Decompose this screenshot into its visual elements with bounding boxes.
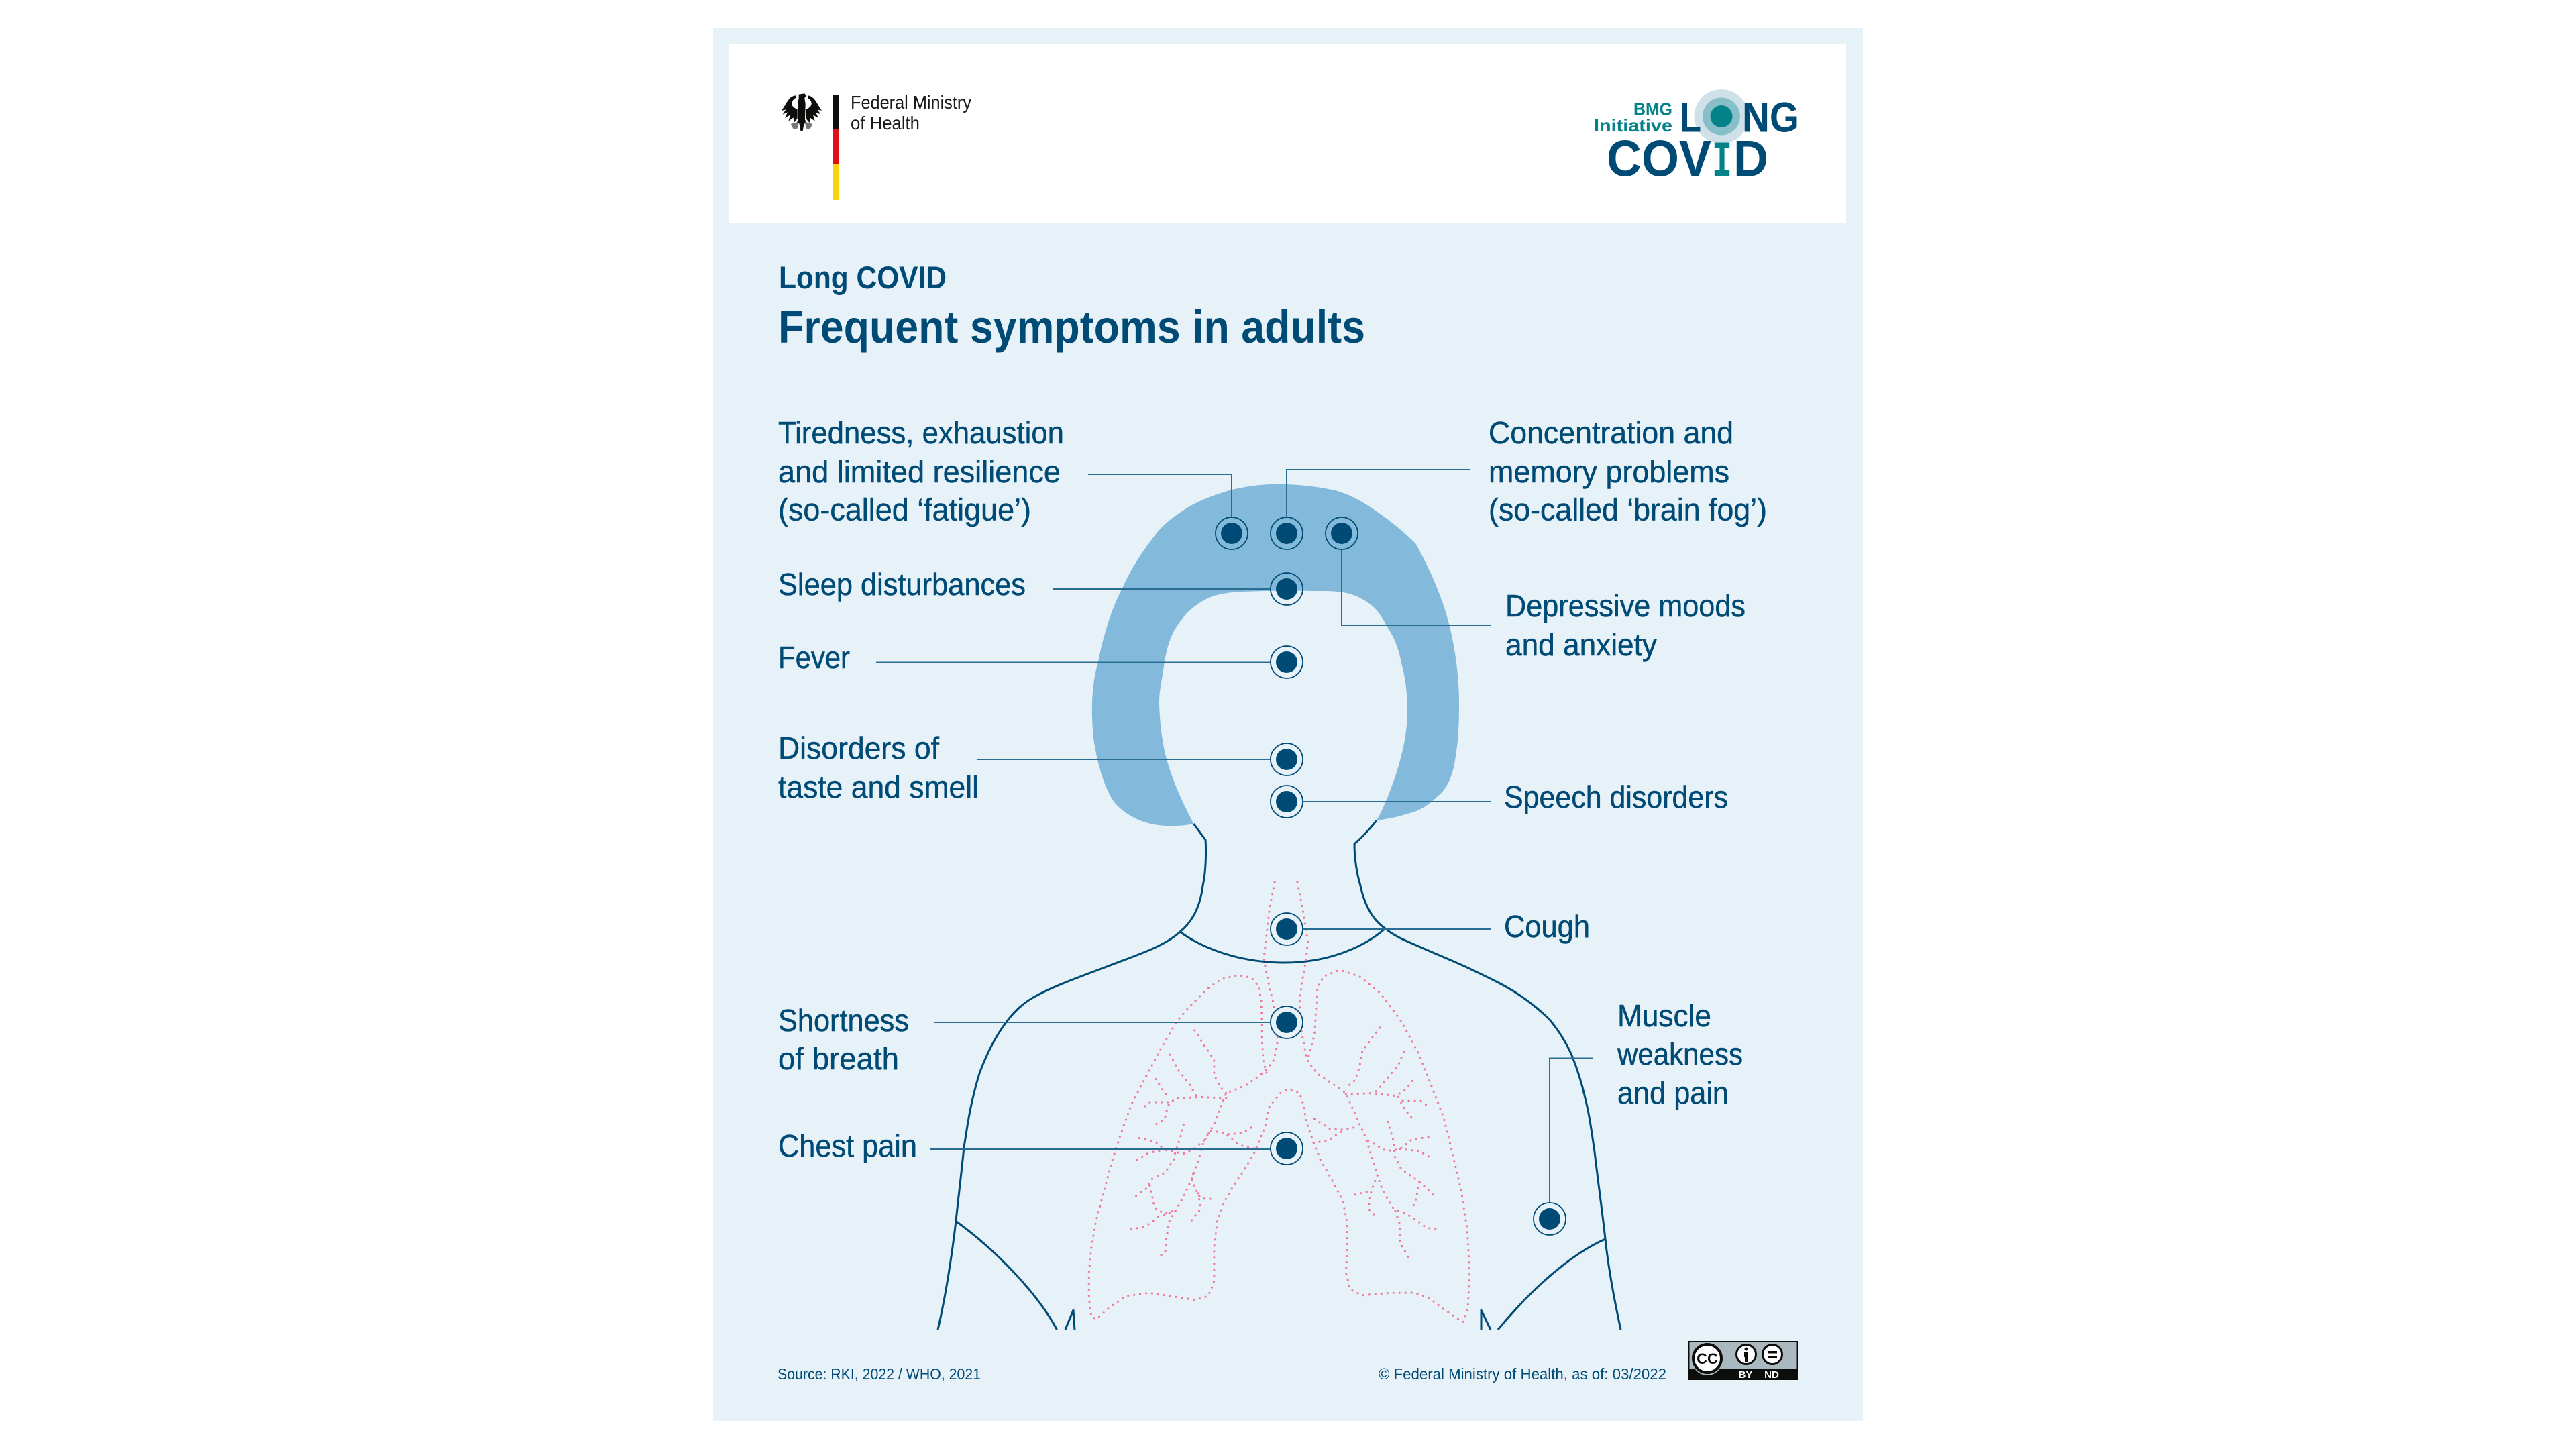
ministry name: of Health [851,113,920,133]
symptom: speech disorders [1271,780,1728,818]
symptom: cough: Cough [1504,909,1590,944]
logo: BMG Initiative Long COVID: I [1712,134,1732,192]
icon: federal eagle [782,93,822,131]
icon: CC BY-ND licence badge: BY [1739,1369,1752,1381]
symptom: fatigue: (so-called ‘fatigue’) [778,492,1031,527]
symptom: fever: Fever [778,640,850,675]
logo: BMG Initiative Long COVID: Initiative [1594,115,1672,136]
copyright note: © Federal Ministry of Health, as of: 03/2022 [1379,1365,1666,1383]
hair shape [1092,484,1459,826]
symptom: brain fog [1271,415,1767,549]
panel: header [729,44,1846,223]
symptom: taste and smell: Disorders of [778,731,939,765]
symptom: shortness of breath: of breath [778,1041,899,1076]
symptom: fatigue: and limited resilience [778,454,1061,489]
symptom: muscle weakness: and pain [1617,1075,1729,1110]
symptom: depressive moods: and anxiety [1505,627,1657,662]
lungs and trachea, dotted [1089,882,1470,1322]
symptom: brain fog: memory problems [1489,454,1729,489]
logo: Federal Ministry of Health [782,92,971,200]
ministry name: Federal Ministry [851,92,971,113]
symptom: speech disorders: Speech disorders [1504,780,1728,814]
logo: BMG Initiative Long COVID [1594,89,1799,192]
symptom: shortness of breath: Shortness [778,1003,909,1038]
symptom: muscle weakness: weakness [1617,1036,1743,1071]
logo: BMG Initiative Long COVID: COV [1607,131,1711,188]
source note: Source: RKI, 2022 / WHO, 2021 [777,1365,981,1383]
logo: BMG Initiative Long COVID: D [1733,131,1768,188]
icon: CC BY-ND licence badge [1688,1341,1798,1381]
symptom: brain fog: (so-called ‘brain fog’) [1489,492,1767,527]
symptom: depressive moods: Depressive moods [1505,588,1746,623]
icon: CC BY-ND licence badge: ND [1764,1369,1779,1381]
title [778,260,1365,353]
symptom: chest pain [778,1128,1303,1165]
symptom: cough [1271,909,1590,945]
symptom: fatigue: Tiredness, exhaustion [778,415,1064,450]
symptom: sleep disturbances [778,567,1303,605]
icon: CC BY-ND licence badge: CC [1697,1350,1718,1367]
symptom: chest pain: Chest pain [778,1128,917,1163]
flag bar [833,95,839,200]
symptom: brain fog: Concentration and [1489,415,1733,450]
symptom: sleep disturbances: Sleep disturbances [778,567,1026,602]
symptom: taste and smell: taste and smell [778,769,979,804]
logo: BMG Initiative Long COVID: BMG [1633,99,1672,119]
logo: BMG Initiative Long COVID: NG [1742,95,1799,142]
ministry name [851,92,971,133]
body outline [938,820,1621,1330]
logo: BMG Initiative Long COVID: L [1680,95,1701,142]
symptom: shortness of breath [778,1003,1303,1076]
title: Long COVID [779,260,947,295]
panel: background [713,28,1863,1421]
symptom: muscle weakness: Muscle [1617,998,1711,1033]
title: Frequent symptoms in adults [778,301,1365,353]
symptom: taste and smell [778,731,1303,804]
symptom: depressive moods [1326,517,1746,662]
symptom: fatigue [778,415,1248,549]
symptom: muscle weakness [1534,998,1743,1235]
symptom: fever [778,640,1303,678]
